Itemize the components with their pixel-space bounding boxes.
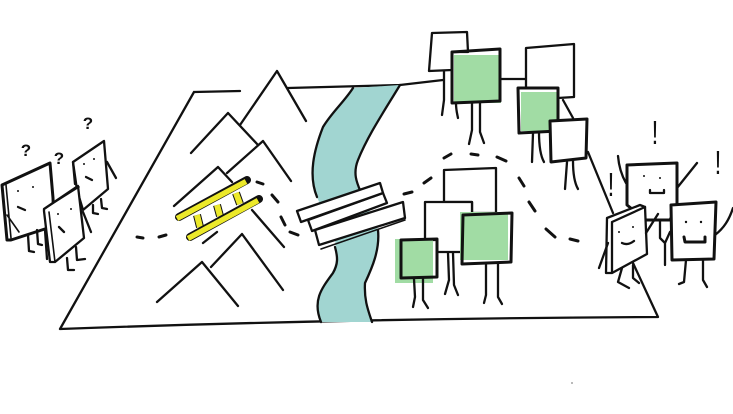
- confused characters on the left: [2, 141, 116, 270]
- question marks: [21, 114, 93, 168]
- happy characters on the right: [599, 156, 733, 288]
- bridge: [297, 183, 405, 249]
- yellow ladder: [177, 180, 259, 238]
- mountains: [157, 71, 306, 306]
- character group: top of map: [429, 32, 501, 144]
- exclamation marks: !: [608, 167, 614, 204]
- character group: top right: [518, 44, 587, 189]
- exclamation marks: !: [715, 145, 721, 182]
- map outline: [60, 79, 658, 329]
- question marks: ?: [54, 149, 64, 168]
- dashed path: [137, 154, 578, 241]
- exclamation marks: [608, 115, 721, 204]
- question marks: ?: [21, 141, 31, 160]
- river: [313, 85, 400, 322]
- question marks: ?: [83, 114, 93, 133]
- small speck: [571, 382, 573, 384]
- exclamation marks: !: [652, 115, 658, 152]
- character group: centre: [395, 168, 512, 308]
